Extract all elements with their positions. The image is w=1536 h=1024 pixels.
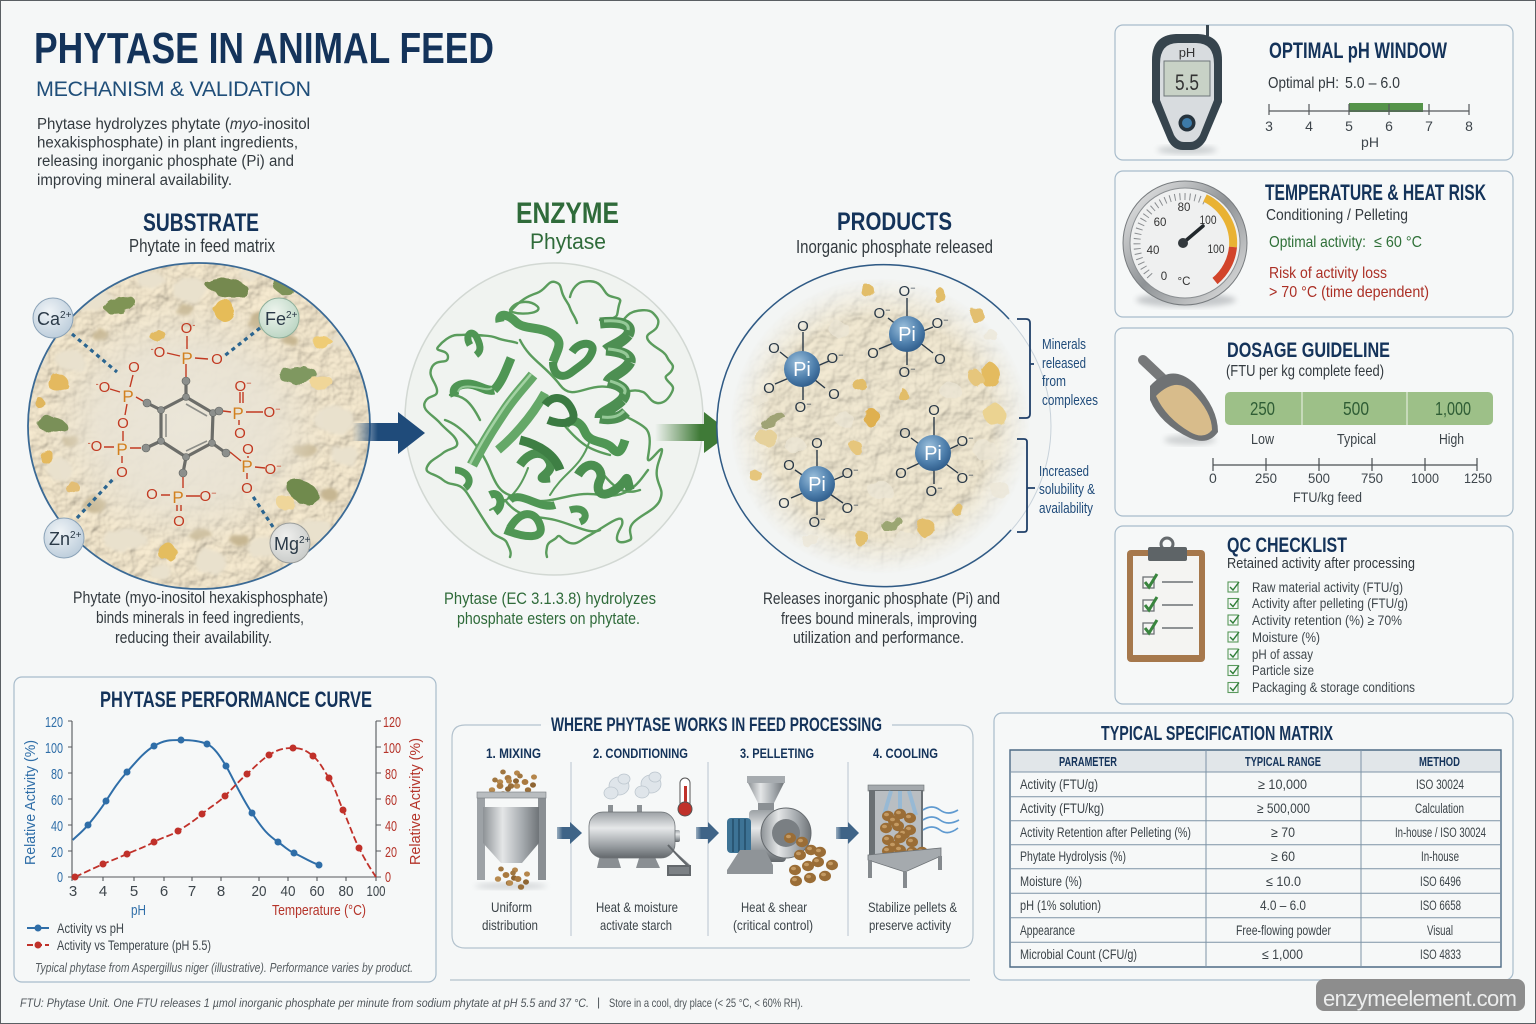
Pi ion 1: O — [768, 340, 780, 357]
step: mixing: 1. MIXING — [486, 745, 541, 761]
chart axes: Temperature (°C) — [272, 902, 366, 919]
Pi ion 3: − — [937, 483, 942, 493]
bracket: increased solubility — [1017, 439, 1095, 532]
specification table: ISO 30024 — [1416, 777, 1464, 792]
curve: activity vs temperature — [72, 744, 376, 880]
Pi ion 3: O — [957, 470, 968, 487]
phosphate bonds — [104, 336, 265, 511]
specification table: In-house / ISO 30024 — [1395, 825, 1486, 840]
substrate heading: Phytate in feed matrix — [129, 236, 275, 256]
pH scale: 5 — [1345, 118, 1353, 134]
products caption: frees bound minerals, improving — [781, 610, 977, 628]
panel: dosage guideline — [1115, 328, 1513, 516]
phosphate atoms: P — [122, 387, 134, 406]
Pi ion 3: O — [928, 402, 940, 419]
FTU scale: FTU/kg feed — [1293, 489, 1362, 505]
panel: temperature and heat risk: Optimal activity: — [1269, 234, 1366, 251]
phosphate atoms: O — [235, 378, 246, 395]
pH scale: 3 — [1265, 118, 1273, 134]
products heading — [796, 208, 993, 257]
panel: QC checklist: QC CHECKLIST — [1227, 534, 1347, 557]
ion: Fe — [259, 298, 299, 338]
icon: temperature gauge: 100 — [1200, 215, 1216, 227]
Pi ion 3: O — [895, 465, 907, 482]
specification table: In-house — [1421, 849, 1459, 864]
panel: dosage guideline: (FTU per kg complete feed) — [1226, 363, 1384, 380]
FTU scale: 250 — [1255, 470, 1277, 486]
phosphate atoms: O — [91, 438, 102, 455]
dose bar: High — [1439, 431, 1464, 448]
chart axes: 60 — [385, 792, 397, 809]
bracket: minerals released: Minerals — [1042, 336, 1086, 353]
hexagon ring — [146, 381, 226, 473]
pH scale: 6 — [1385, 118, 1393, 134]
Pi ion 1: − — [806, 399, 811, 409]
enzyme heading — [516, 197, 619, 254]
Pi ion 1: Pi — [793, 359, 811, 381]
checklist items — [1228, 580, 1415, 695]
phosphate atoms: − — [246, 378, 251, 388]
footnote: Store in a cool, dry place (< 25 °C, < 60% RH). — [609, 996, 803, 1010]
panel: temperature and heat risk: ≤ 60 °C — [1374, 234, 1422, 251]
FTU scale: 0 — [1209, 470, 1217, 486]
ion: Ca — [33, 298, 73, 338]
step: cooling: 4. COOLING — [873, 745, 938, 761]
chart axes: 5 — [130, 883, 138, 900]
checklist items: pH of assay — [1252, 647, 1313, 662]
Pi ion 1: − — [838, 350, 843, 360]
phosphate atoms: O — [200, 488, 211, 505]
FTU scale: 1000 — [1411, 470, 1439, 486]
dose bar: 500 — [1343, 399, 1369, 419]
intro text: releasing inorganic phosphate (Pi) and — [37, 153, 294, 170]
Pi ion 4: O — [778, 495, 790, 512]
phosphate atoms: O — [265, 461, 276, 478]
bracket: increased solubility: solubility & — [1039, 481, 1095, 498]
phosphate atoms: - — [88, 438, 91, 448]
panel: temperature and heat risk: > 70 °C (time dependent) — [1269, 284, 1429, 301]
ion: Fe: 2+ — [286, 310, 298, 321]
legend: Activity vs Temperature (pH 5.5) — [57, 938, 211, 953]
specification table: ≥ 500,000 — [1257, 801, 1310, 816]
Pi ion 2: O — [934, 351, 946, 368]
phosphate atoms: − — [276, 461, 281, 471]
phosphate atoms: O — [181, 320, 192, 337]
legend: Activity vs pH — [57, 921, 124, 936]
intro text: improving mineral availability. — [37, 172, 232, 189]
phosphate atoms: O — [242, 441, 254, 458]
panel: optimal pH window — [1115, 25, 1513, 160]
icon: temperature gauge — [1123, 181, 1247, 307]
panel: dosage guideline: DOSAGE GUIDELINE — [1227, 339, 1390, 362]
ion: Fe: Fe — [265, 309, 286, 329]
specification table — [1010, 750, 1501, 967]
curve: activity vs pH — [73, 736, 322, 868]
icon: temperature gauge: 0 — [1161, 271, 1167, 283]
specification table: ISO 4833 — [1420, 947, 1461, 962]
Pi ion 3 — [895, 402, 973, 500]
bracket: increased solubility: availability — [1039, 500, 1093, 517]
Pi ion 2: O — [899, 364, 910, 381]
step: cooling — [868, 745, 959, 933]
phosphate atoms: P — [232, 404, 244, 423]
ion: Zn — [44, 518, 84, 558]
phosphate atoms: O — [146, 486, 158, 503]
Pi ion 4: − — [853, 500, 858, 510]
phytate molecule — [88, 320, 281, 530]
chart axes: Relative Activity (%) — [22, 740, 39, 865]
Pi ion 1: O — [828, 386, 840, 403]
products caption — [763, 590, 1000, 647]
icon: temperature gauge: °C — [1178, 276, 1190, 288]
panel: optimal pH window: Optimal pH: — [1268, 75, 1339, 92]
enzyme caption: Phytase (EC 3.1.3.8) hydrolyzes — [444, 590, 656, 608]
products caption: utilization and performance. — [793, 629, 964, 647]
specification table: 4.0 – 6.0 — [1260, 898, 1306, 913]
panel: phytase performance curve: PHYTASE PERFORMANCE CURVE — [100, 687, 372, 712]
legend — [27, 921, 211, 953]
pH scale: 7 — [1425, 118, 1433, 134]
chart axes: 100 — [45, 740, 63, 757]
chart note: Typical phytase from Aspergillus niger (illustrative). Performance varies by product. — [35, 961, 413, 975]
Pi ion 4: O — [842, 465, 853, 482]
phosphate atoms: O — [173, 513, 185, 530]
phosphate atoms: − — [211, 488, 216, 498]
Pi ion 1 — [763, 318, 843, 416]
mineral bridges — [72, 328, 273, 527]
specification table: Calculation — [1415, 801, 1464, 816]
products caption: Releases inorganic phosphate (Pi) and — [763, 590, 1000, 608]
specification table: ≤ 1,000 — [1262, 947, 1303, 962]
chart axes: 120 — [45, 714, 63, 731]
specification table: Appearance — [1020, 923, 1075, 938]
panel: feed processing — [452, 715, 973, 948]
phosphate atoms: O — [264, 404, 275, 421]
bracket: minerals released — [1017, 319, 1098, 418]
Pi ion 4 — [778, 435, 858, 531]
step: pelleting: Heat & shear — [741, 899, 807, 915]
chart axes: 20 — [385, 844, 397, 861]
substrate caption: binds minerals in feed ingredients, — [96, 609, 304, 627]
substrate heading: SUBSTRATE — [143, 209, 259, 237]
substrate caption: reducing their availability. — [115, 629, 272, 647]
icon: feed scoop — [1143, 360, 1218, 445]
bracket: minerals released: from — [1042, 373, 1066, 390]
enzyme caption: phosphate esters on phytate. — [457, 610, 640, 628]
chart axes: 0 — [57, 869, 63, 886]
checklist items: Raw material activity (FTU/g) — [1252, 580, 1403, 595]
Pi ion 3: − — [968, 470, 973, 480]
chart axes: 100 — [366, 883, 386, 900]
phosphate atoms: O — [234, 425, 246, 442]
checklist items: Packaging & storage conditions — [1252, 680, 1415, 695]
step: mixing: Uniform — [491, 899, 532, 915]
ion: Mg: 2+ — [299, 535, 311, 546]
pH scale: 8 — [1465, 118, 1473, 134]
phosphate atoms: O — [154, 344, 165, 361]
Pi ion 4: − — [820, 514, 825, 524]
panel: optimal pH window: 5.0 – 6.0 — [1345, 75, 1400, 92]
checklist items: Activity after pelleting (FTU/g) — [1252, 596, 1408, 611]
substrate circle: phytate in feed matrix — [20, 255, 380, 595]
substrate caption: Phytate (myo-inositol hexakisphosphate) — [73, 589, 328, 607]
specification table: ≥ 10,000 — [1258, 777, 1307, 792]
ribbon helices — [454, 358, 511, 396]
step: mixing: distribution — [482, 917, 538, 933]
products heading: Inorganic phosphate released — [796, 237, 993, 257]
Pi ion 1: O — [795, 399, 806, 416]
Pi ion 4: − — [853, 465, 858, 475]
panel: temperature and heat risk — [1115, 171, 1513, 317]
beta sheet strips — [472, 375, 533, 465]
bracket: minerals released: released — [1042, 355, 1086, 372]
arrow: substrate to enzyme — [352, 412, 425, 454]
arrow: mixing to conditioning — [557, 822, 582, 844]
phosphate atoms: O — [116, 464, 128, 481]
Pi ion 1: O — [797, 318, 809, 335]
specification table: Activity (FTU/kg) — [1020, 801, 1104, 816]
panel: typical specification matrix: TYPICAL SPECIFICATION MATRIX — [1101, 723, 1333, 745]
icon: pH meter — [1152, 25, 1222, 154]
chart axes: 80 — [338, 883, 354, 900]
chart axes: 80 — [51, 766, 63, 783]
enzyme heading: Phytase — [530, 229, 606, 254]
pH scale — [1265, 103, 1473, 150]
specification table: Phytate Hydrolysis (%) — [1020, 849, 1126, 864]
dose bar — [1225, 392, 1493, 448]
panel: QC checklist: Retained activity after processing — [1227, 555, 1415, 572]
Pi ion 4: Pi — [808, 474, 826, 496]
chart axes: 3 — [69, 883, 77, 900]
ion: Mg — [270, 523, 311, 563]
intro text: hexakisphosphate) in plant ingredients, — [37, 134, 298, 152]
ion: Mg: Mg — [274, 534, 299, 554]
arrow: enzyme to products — [655, 412, 731, 453]
phosphate atoms: − — [275, 404, 280, 414]
chart axes: 0 — [385, 869, 391, 886]
specification table: ≥ 70 — [1271, 825, 1295, 840]
Pi ion 2 — [867, 283, 948, 381]
phosphate atoms — [88, 320, 281, 530]
specification table: Moisture (%) — [1020, 874, 1082, 889]
dose bar: 1,000 — [1435, 399, 1471, 419]
chart axes: 6 — [160, 883, 168, 900]
enzyme heading: ENZYME — [516, 197, 619, 230]
chart axes: 60 — [310, 883, 324, 900]
panel: phytase performance curve — [14, 677, 436, 982]
watermark: enzymeelement.com — [1323, 986, 1517, 1011]
icon: temperature gauge: 40 — [1147, 245, 1159, 257]
chart axes: pH — [131, 902, 146, 919]
step: pelleting: 3. PELLETING — [740, 745, 814, 761]
phosphate atoms: P — [116, 440, 128, 459]
icon: temperature gauge: 60 — [1154, 217, 1166, 229]
icon: pH meter: 5.5 — [1175, 70, 1199, 95]
helix right — [454, 315, 630, 536]
enzyme circle: phytase ribbon structure — [405, 263, 703, 575]
chart axes: 8 — [217, 883, 225, 900]
specification table: ≥ 60 — [1271, 849, 1295, 864]
ion: Zn: Zn — [49, 529, 70, 549]
icon: temperature gauge: 80 — [1178, 202, 1190, 214]
chart axes: 40 — [280, 883, 296, 900]
chart axes: 7 — [188, 883, 196, 900]
chart axes: 20 — [51, 844, 63, 861]
Pi ion 3: Pi — [924, 443, 942, 465]
phosphate atoms: O — [117, 415, 129, 432]
specification table: Activity (FTU/g) — [1020, 777, 1098, 792]
FTU scale: 1250 — [1464, 470, 1492, 486]
phosphate atoms: O — [99, 379, 110, 396]
products heading: PRODUCTS — [837, 208, 952, 236]
Pi ion 2: − — [910, 283, 915, 293]
arrow: pelleting to cooling — [836, 822, 859, 844]
Pi ion 1: O — [827, 350, 838, 367]
FTU scale — [1209, 458, 1492, 505]
chart axes: 80 — [385, 766, 397, 783]
checklist items: Moisture (%) — [1252, 630, 1320, 645]
chart axes: 40 — [51, 818, 63, 835]
pH scale: 4 — [1305, 118, 1313, 134]
subtitle: MECHANISM & VALIDATION — [36, 77, 311, 101]
specification table: ≤ 10.0 — [1266, 874, 1301, 889]
chart axes: 100 — [383, 740, 401, 757]
Pi ion 3: O — [899, 425, 911, 442]
chart axes — [22, 714, 424, 919]
specification table: Microbial Count (CFU/g) — [1020, 947, 1137, 962]
Pi ion 2: O — [867, 345, 879, 362]
Pi ion 2: − — [910, 364, 915, 374]
phosphate atoms: O — [211, 351, 223, 368]
panel: QC checklist — [1115, 526, 1513, 704]
phosphate atoms: O — [128, 359, 140, 376]
Pi ion 3: − — [968, 433, 973, 443]
dose bar: Low — [1251, 431, 1274, 448]
phosphate atoms: - — [151, 344, 154, 354]
footnote: | — [597, 995, 600, 1009]
step: cooling: Stabilize pellets & — [868, 899, 958, 915]
step: cooling: preserve activity — [869, 917, 951, 933]
phosphate atoms: P — [172, 488, 184, 507]
step: conditioning: Heat & moisture — [596, 899, 678, 915]
Pi ion 4: O — [809, 514, 820, 531]
Pi ion 2: O — [899, 283, 910, 300]
checklist items: Activity retention (%) ≥ 70% — [1252, 613, 1402, 628]
specification table: PARAMETER — [1059, 754, 1117, 769]
chart axes: 20 — [252, 883, 266, 900]
Pi ion 3: O — [957, 433, 968, 450]
phosphate atoms: - — [192, 320, 195, 330]
checklist items: Particle size — [1252, 663, 1314, 678]
protein coil loops — [424, 281, 673, 557]
FTU scale: 500 — [1308, 470, 1330, 486]
panel: typical specification matrix — [994, 713, 1513, 980]
Pi ion 3: O — [926, 483, 937, 500]
icon: temperature gauge: 100 — [1208, 244, 1224, 256]
specification table: Visual — [1427, 923, 1453, 938]
step: conditioning: 2. CONDITIONING — [593, 745, 688, 761]
phosphate atoms: P — [181, 349, 193, 368]
panel: temperature and heat risk: Risk of activity loss — [1269, 265, 1387, 282]
Pi ion 2: Pi — [898, 324, 916, 346]
chart axes: 4 — [99, 883, 107, 900]
FTU scale: 750 — [1361, 470, 1383, 486]
step: conditioning: activate starch — [600, 917, 672, 933]
intro text — [37, 116, 310, 189]
step: conditioning — [589, 745, 692, 933]
specification table: pH (1% solution) — [1020, 898, 1101, 913]
Pi ion 1: O — [763, 380, 775, 397]
step: mixing — [475, 745, 547, 933]
Pi ion 4: O — [811, 435, 823, 452]
footnote: FTU: Phytase Unit. One FTU releases 1 µmol inorganic phosphate per minute from sodium phytate at pH 5.5 and 37 °C. — [20, 996, 589, 1010]
ion: Zn: 2+ — [70, 530, 82, 541]
dose bar: Typical — [1337, 431, 1376, 448]
title: PHYTASE IN ANIMAL FEED — [34, 24, 494, 73]
panel: feed processing: WHERE PHYTASE WORKS IN FEED PROCESSING — [551, 715, 882, 736]
chart axes: 40 — [385, 818, 397, 835]
substrate caption — [73, 589, 328, 647]
dose bar: 250 — [1250, 399, 1275, 419]
bracket: increased solubility: Increased — [1039, 463, 1089, 480]
Pi ion 2: − — [943, 315, 948, 325]
intro text: Phytase hydrolyzes phytate (myo-inositol — [37, 116, 310, 133]
Pi ion 2: − — [885, 305, 890, 315]
chart axes: 120 — [383, 714, 401, 731]
pH scale: pH — [1361, 134, 1379, 150]
icon: pH meter: pH — [1179, 45, 1195, 60]
Pi ion 4: O — [783, 457, 795, 474]
specification table: METHOD — [1419, 754, 1460, 769]
ion: Ca: Ca — [37, 309, 60, 329]
step: pelleting: (critical control) — [733, 917, 813, 933]
specification table: Activity Retention after Pelleting (%) — [1020, 825, 1191, 840]
bracket: minerals released: complexes — [1042, 392, 1098, 409]
chart axes: 60 — [51, 792, 63, 809]
panel: optimal pH window: OPTIMAL pH WINDOW — [1269, 38, 1447, 63]
specification table: TYPICAL RANGE — [1245, 754, 1321, 769]
enzyme caption — [444, 590, 656, 628]
phosphate atoms: - — [96, 379, 99, 389]
specification table: Free-flowing powder — [1236, 923, 1331, 938]
arrow: conditioning to pelleting — [696, 822, 719, 844]
specification table: ISO 6496 — [1420, 874, 1461, 889]
step: pelleting — [727, 745, 838, 933]
phosphate atoms: O — [241, 480, 253, 497]
Pi ion 2: O — [874, 305, 885, 322]
icon: clipboard — [1127, 538, 1205, 662]
Pi ion 2: O — [932, 315, 943, 332]
Pi ion 4: O — [842, 500, 853, 517]
specification table: ISO 6658 — [1420, 898, 1461, 913]
phosphate atoms: P — [241, 457, 253, 476]
panel: temperature and heat risk: Conditioning / Pelleting — [1266, 207, 1408, 224]
chart axes: Relative Activity (%) — [407, 738, 424, 865]
substrate heading — [129, 209, 275, 256]
products circle: released phosphate — [717, 265, 1051, 587]
ion: Ca: 2+ — [60, 310, 72, 321]
